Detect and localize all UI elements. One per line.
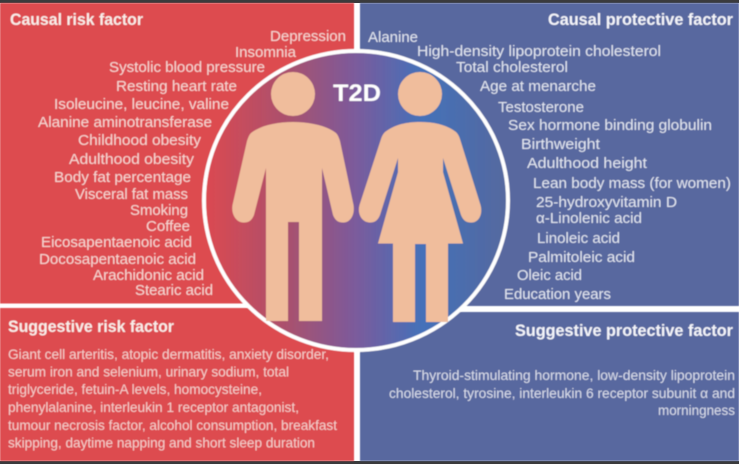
list: causal risk factors: Smoking [130,202,188,219]
heading: suggestive protective factor: Suggestive protective factor [515,322,734,340]
list: causal risk factors: Coffee [146,218,190,235]
list: causal risk factors: Isoleucine, leucine, valine [54,96,229,113]
list: causal protective factors: Oleic acid [517,267,582,284]
list: causal protective factors: Birthweight [521,136,601,153]
text block: suggestive protective factors: Thyroid-stimulating hormone, low-density lipoprotein [413,368,735,383]
panel: suggestive risk factor [0,308,354,461]
list: causal protective factors: Adulthood height [527,155,648,172]
text block: suggestive protective factors: cholesterol, tyrosine, interleukin 6 receptor subunit α and [389,386,735,401]
list: causal protective factors: High-density lipoprotein cholesterol [417,43,661,60]
icon: female figure [359,72,481,322]
title: T2D: T2D [333,80,381,107]
heading: causal risk factor: Causal risk factor [10,11,144,29]
central circle with figures [204,51,508,350]
list: causal protective factors [368,29,731,303]
list: causal risk factors: Alanine aminotransferase [38,114,212,131]
list: causal risk factors: Body fat percentage [54,169,191,186]
list: causal protective factors: Testosterone [498,99,584,116]
list: causal protective factors: Palmitoleic acid [528,249,635,266]
list: causal risk factors: Depression [270,28,346,45]
list: causal protective factors: Education years [504,286,611,303]
text block: suggestive risk factors: Giant cell arteritis, atopic dermatitis, anxiety disorder, [8,347,329,362]
list: causal risk factors: Stearic acid [135,282,213,299]
list: causal protective factors: Total cholesterol [456,59,568,76]
list: causal protective factors: 25-hydroxyvitamin D [536,194,677,211]
list: causal risk factors: Childhood obesity [78,132,202,149]
panel: causal risk factor [0,3,354,304]
panel: causal protective factor [360,3,739,306]
list: causal risk factors: Systolic blood pressure [109,59,265,76]
icon: male figure [232,72,354,321]
list: causal protective factors: Lean body mass (for women) [533,175,731,192]
heading: suggestive risk factor: Suggestive risk factor [8,318,175,336]
list: causal risk factors: Docosapentaenoic acid [39,251,196,268]
list: causal risk factors: Arachidonic acid [93,267,204,284]
list: causal risk factors: Insomnia [235,44,297,61]
panel: suggestive protective factor [360,312,739,461]
list: causal protective factors: Linoleic acid [537,230,620,247]
heading: causal protective factor: Causal protective factor [548,11,734,29]
text block: suggestive risk factors: tumour necrosis factor, alcohol consumption, breakfast [8,418,337,433]
list: causal protective factors: Age at menarche [480,78,596,95]
list: causal protective factors: Alanine [368,29,418,46]
list: causal risk factors: Adulthood obesity [69,151,195,168]
text block: suggestive protective factors [389,368,735,418]
text block: suggestive risk factors [8,347,337,450]
list: causal protective factors: Sex hormone binding globulin [508,117,712,134]
text block: suggestive protective factors: morningness [658,403,735,418]
list: causal risk factors: Eicosapentaenoic acid [41,234,192,251]
list: causal risk factors: Resting heart rate [116,78,237,95]
list: causal protective factors: α-Linolenic acid [536,210,642,227]
text block: suggestive risk factors: triglyceride, fetuin-A levels, homocysteine, [8,382,262,397]
text block: suggestive risk factors: serum iron and selenium, urinary sodium, total [8,364,289,380]
list: causal risk factors: Visceral fat mass [75,186,188,203]
text block: suggestive risk factors: skipping, daytime napping and short sleep duration [8,436,315,450]
list: causal risk factors [38,28,346,299]
text block: suggestive risk factors: phenylalanine, interleukin 1 receptor antagonist, [8,400,299,415]
